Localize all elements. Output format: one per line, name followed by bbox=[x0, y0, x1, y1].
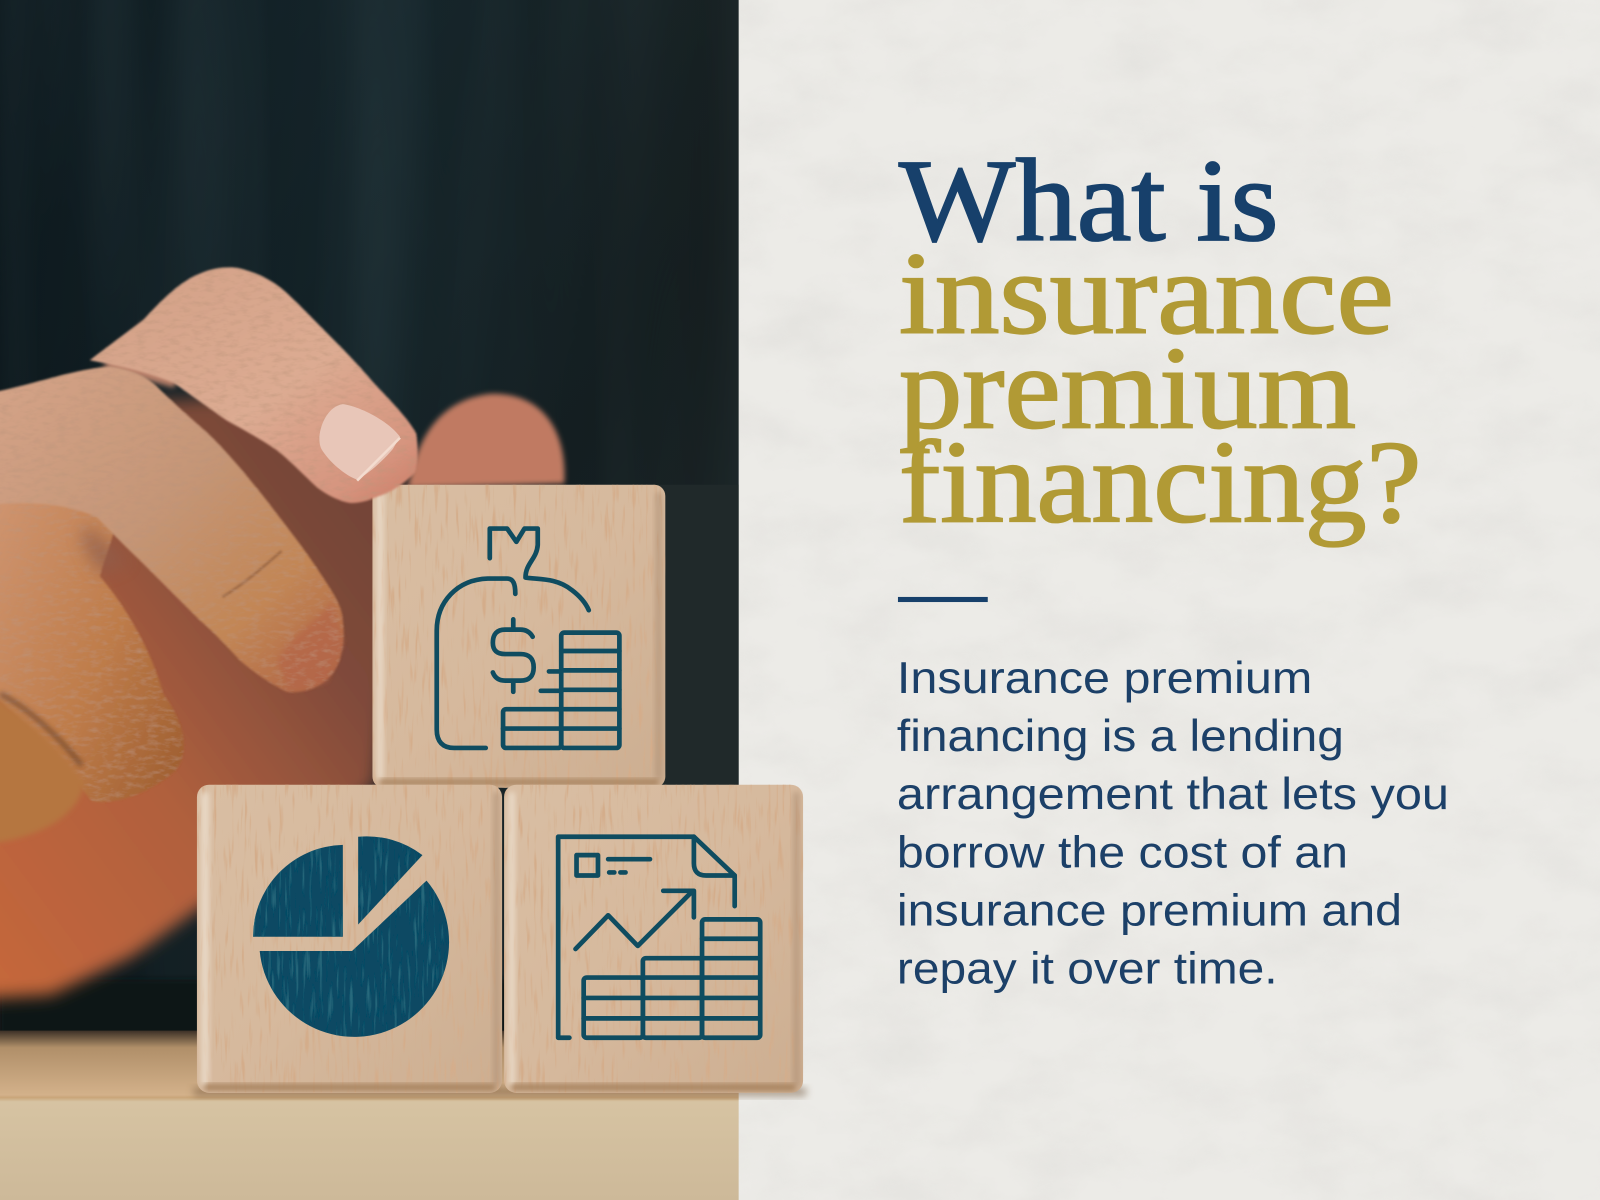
icon: pie chart bbox=[253, 836, 449, 1037]
wooden block: financial report bbox=[504, 785, 803, 1093]
title: premium bbox=[899, 324, 1356, 454]
body text: Insurance premium bbox=[897, 652, 1312, 703]
body text: financing is a lending bbox=[897, 710, 1344, 761]
title: What is bbox=[899, 136, 1279, 266]
wooden block: pie chart bbox=[197, 785, 502, 1093]
fingernail bbox=[319, 404, 400, 481]
middle finger bbox=[0, 366, 344, 692]
title bbox=[899, 136, 1421, 547]
hand behind blocks bbox=[0, 322, 565, 1000]
body text bbox=[897, 652, 1449, 994]
divider rule bbox=[898, 597, 988, 602]
little finger bbox=[0, 694, 84, 844]
icon: report with chart and coin stacks bbox=[558, 837, 760, 1038]
body text: repay it over time. bbox=[897, 943, 1278, 994]
wooden block: money bag bbox=[372, 485, 665, 788]
crease between fingers bbox=[0, 694, 82, 765]
body text: borrow the cost of an bbox=[897, 826, 1348, 877]
shadow gap between fingers bbox=[82, 526, 128, 573]
paper panel bbox=[739, 0, 1600, 1200]
icon: money bag with coins bbox=[437, 529, 619, 748]
block shadow on table bbox=[194, 1088, 806, 1096]
index finger gripping the block bbox=[90, 267, 418, 503]
hand body and ring finger bbox=[0, 393, 184, 802]
photo background: dark backdrop and table bbox=[0, 0, 739, 1200]
title: insurance bbox=[899, 229, 1394, 359]
body text: arrangement that lets you bbox=[897, 768, 1449, 819]
title: financing? bbox=[899, 417, 1421, 547]
body text: insurance premium and bbox=[897, 885, 1402, 936]
